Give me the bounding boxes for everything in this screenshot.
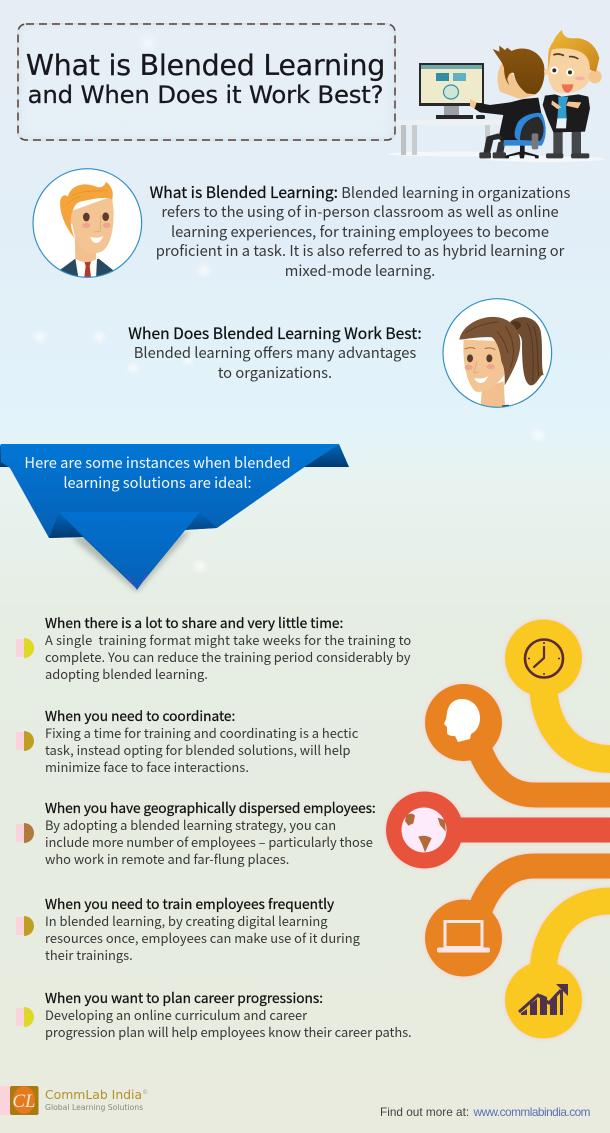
text: what is blended learning: What is Blended Learning: Blended learning in organizations	[150, 181, 570, 203]
portrait: woman with ponytail	[442, 298, 552, 408]
scenario 5: When you want to plan career progressions:	[45, 987, 323, 1007]
scenario 4: When you need to train employees frequently	[45, 893, 334, 913]
title text: and When Does it Work Best?	[28, 80, 383, 109]
title text	[26, 49, 385, 109]
illustration: two office workers at a computer	[388, 30, 605, 162]
scenario 3: include more number of employees – particularly those	[45, 832, 373, 851]
scenario 1: A single training format might take weeks for the training to	[45, 630, 411, 649]
pipe and head node	[425, 684, 610, 795]
pipe and growth chart node	[505, 901, 610, 1038]
scenario 2	[16, 705, 358, 776]
scenario 3: When you have geographically dispersed employees:	[45, 797, 376, 817]
text: what is blended learning: mixed-mode learning.	[285, 260, 435, 281]
ribbon text	[24, 452, 291, 492]
logo: CommLab India: CommLab India©	[45, 1087, 148, 1102]
scenario 3: By adopting a blended learning strategy, you can	[45, 815, 336, 834]
scenario 1: adopting blended learning.	[45, 664, 208, 683]
text: what is blended learning	[150, 181, 570, 281]
logo mark	[0, 1086, 38, 1115]
scenario 5: progression plan will help employees know their career paths.	[45, 1022, 412, 1041]
scenario 4: In blended learning, by creating digital learning	[45, 911, 328, 930]
scenario 1: complete. You can reduce the training period considerably by	[45, 647, 411, 666]
text: when blended learning works best	[128, 322, 422, 383]
text: what is blended learning: proficient in a task. It is also referred to as hybrid learning or	[156, 240, 564, 261]
scenario 2: minimize face to face interactions.	[45, 757, 249, 776]
logo mark: CL	[12, 1091, 36, 1112]
scenario 5: Developing an online curriculum and career	[45, 1005, 307, 1024]
scenario 2: task, instead opting for blended solutions, will help	[45, 740, 351, 759]
ribbon shape	[0, 444, 349, 593]
title text: What is Blended Learning	[26, 49, 385, 82]
text: when blended learning works best: to organizations.	[218, 362, 332, 383]
title panel	[17, 23, 396, 141]
scenario 4	[16, 893, 360, 964]
scenario 5	[16, 987, 412, 1041]
scenario 4: resources once, employees can make use of it during	[45, 928, 360, 947]
scenario 4: their trainings.	[45, 945, 133, 964]
scenario 2: Fixing a time for training and coordinating is a hectic	[45, 723, 358, 742]
text: what is blended learning: refers to the using of in-person classroom as well as online	[161, 201, 559, 222]
scenario 3	[16, 797, 376, 868]
ribbon text: Here are some instances when blended	[24, 452, 291, 473]
scenario 3: who work in remote and far-flung places.	[45, 849, 289, 868]
scenario 1	[16, 612, 411, 683]
connector graphic with five round icons	[384, 618, 610, 1040]
text: when blended learning works best: Blended learning offers many advantages	[134, 342, 416, 363]
intro: what is blended learning	[32, 168, 570, 281]
bar and globe node	[386, 792, 610, 868]
logo: CommLab India	[0, 1086, 148, 1115]
footer link: Find out more at: www.commlabindia.com	[380, 1105, 590, 1119]
pipe and laptop node	[425, 866, 610, 976]
portrait: man with tie	[32, 168, 142, 278]
dashed frame	[17, 23, 396, 141]
logo: CommLab India: Global Learning Solutions	[45, 1103, 143, 1112]
list of five scenarios	[16, 612, 412, 1041]
logo wordmark	[45, 1087, 148, 1112]
intro: when does blended learning work best	[128, 298, 552, 408]
ribbon text: learning solutions are ideal:	[63, 472, 252, 492]
banner ribbon	[0, 444, 349, 593]
scenario 2: When you need to coordinate:	[45, 705, 235, 725]
pipe and clock node	[505, 620, 610, 759]
scenario 1: When there is a lot to share and very little time:	[45, 612, 343, 632]
text: what is blended learning: learning experiences, for training employees to become	[171, 221, 549, 242]
text: when blended learning works best: When Does Blended Learning Work Best:	[128, 322, 422, 344]
